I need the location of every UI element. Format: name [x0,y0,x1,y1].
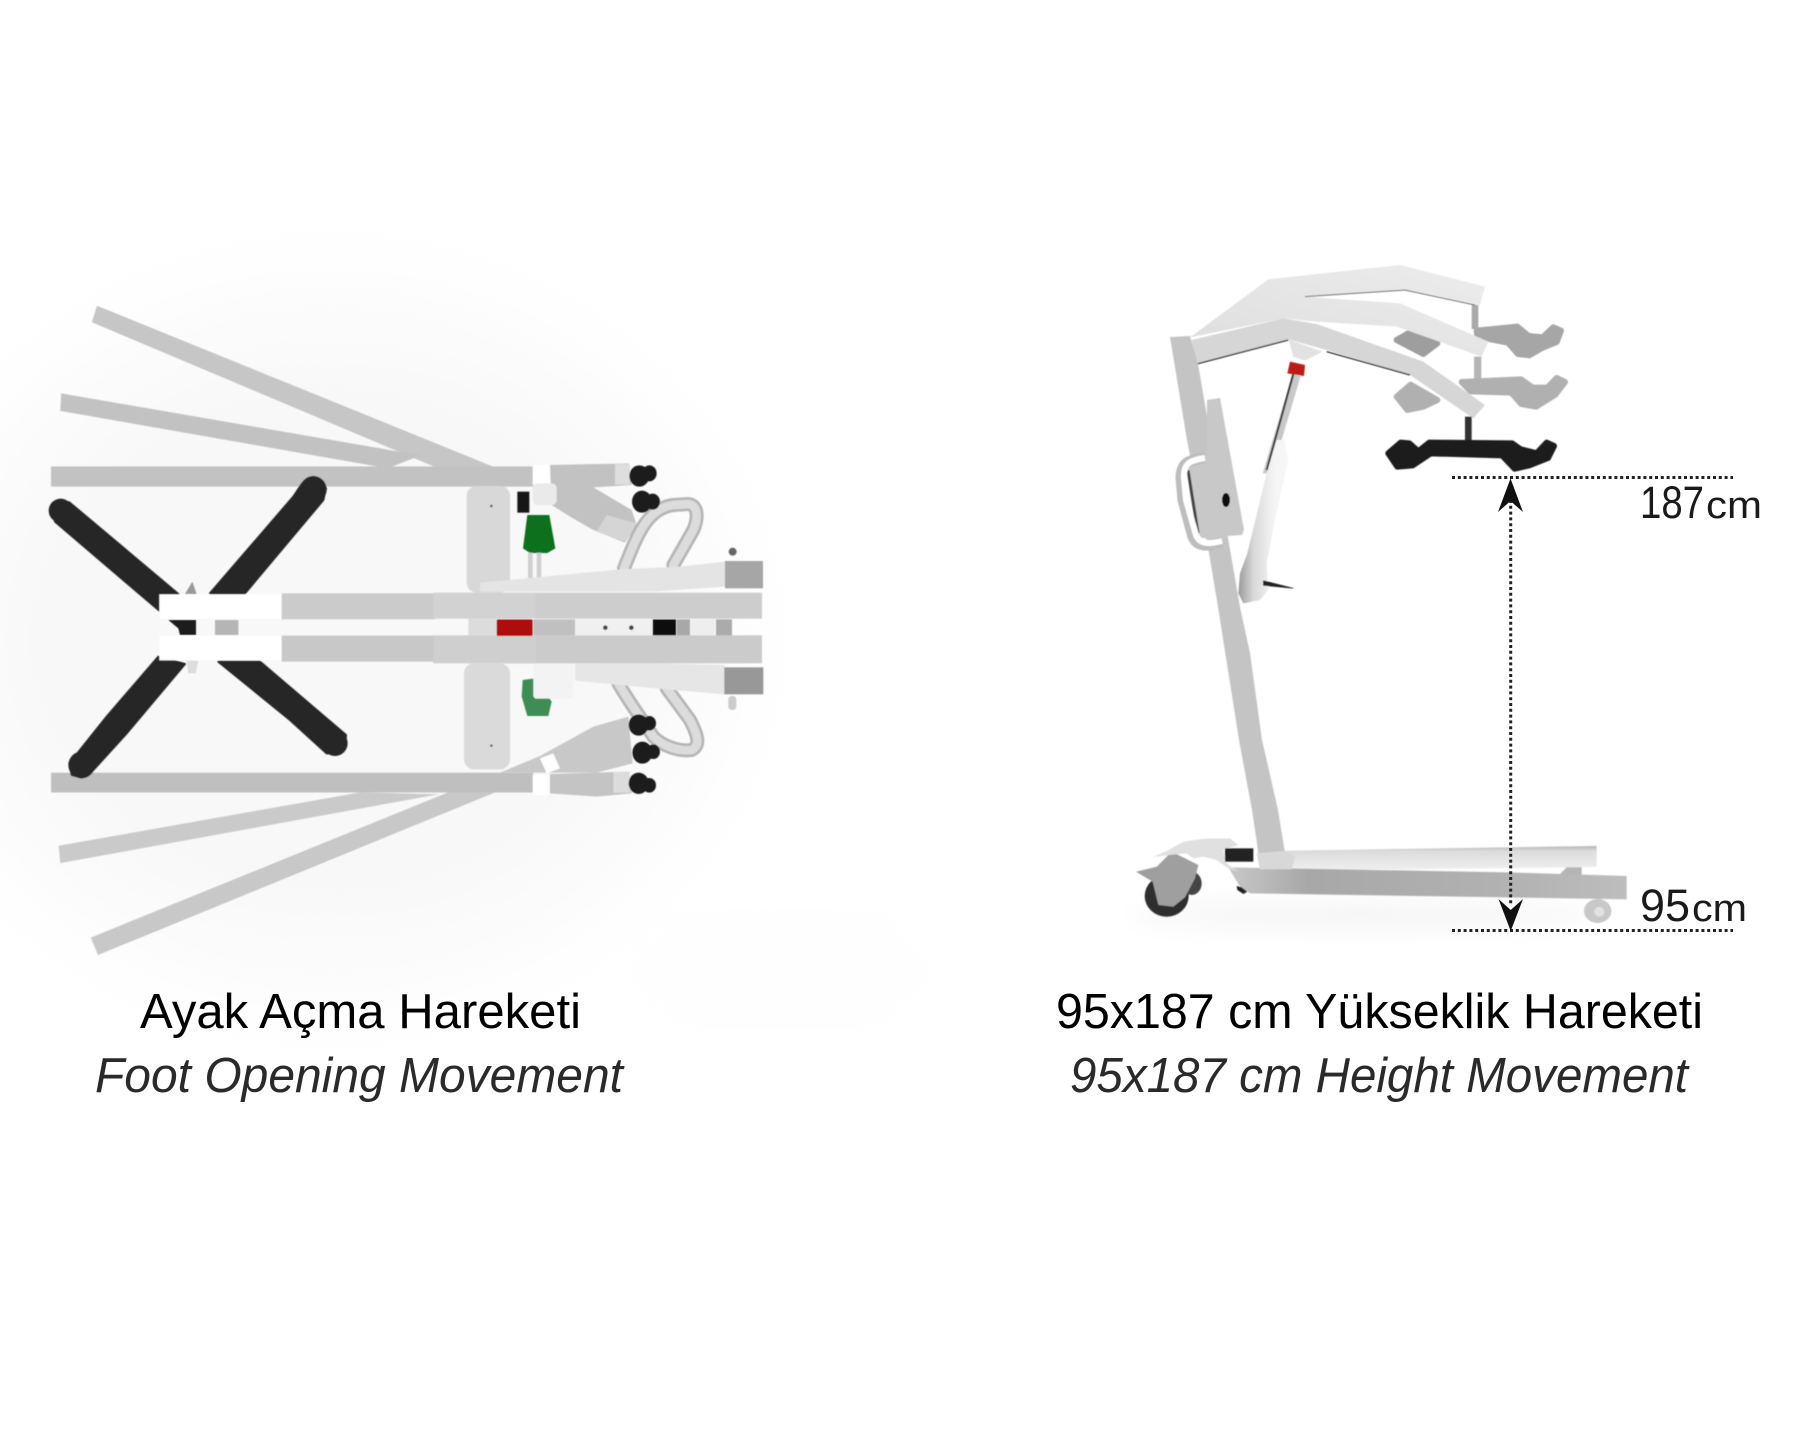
label: 95cm [1640,880,1747,931]
lower plate [477,663,725,694]
label: 187cm: 187 [1640,477,1704,528]
upper arm positions [1190,265,1488,357]
actuator body [1238,440,1293,603]
label: 187cm: cm [1706,485,1762,527]
caption: foot opening (English): Foot Opening Movement [95,1049,625,1103]
side panels [467,486,510,593]
caption: height (Turkish): 95x187 cm Yükseklik Hareketi [1056,985,1703,1039]
lower bracket [500,717,633,773]
black hanger [1465,417,1472,443]
dimension lines [1452,478,1733,930]
base legs in open and closed positions [51,306,533,955]
central beam right part [433,593,537,619]
push handle top [624,504,697,568]
hangers and arms [1190,265,1565,473]
top bracket [550,463,637,543]
actuator rod [1263,374,1301,473]
right caster [1584,899,1611,923]
mast assembly, handles and controls [433,463,763,797]
caption: foot opening (Turkish): Ayak Açma Hareketi [140,985,581,1039]
lower arm [1192,318,1485,418]
arrow: up to 187 cm [1498,478,1523,512]
knobs lower [629,714,660,794]
diagram: foot opening movement (top view) [49,306,763,955]
mast [1170,336,1293,868]
label: 95cm: 95 [1640,880,1690,931]
control plate and push handle [1181,398,1244,545]
caption: height (English): 95x187 cm Height Movement [1070,1049,1690,1103]
black support pads [49,476,348,778]
lower handle [618,683,697,750]
label: 187cm [1640,477,1762,528]
mast foot [1257,851,1295,869]
arrow: down to 95 cm [1498,899,1523,931]
upper plate [480,562,725,592]
left caster [1182,872,1202,895]
diagram: height movement (side view) [1136,265,1627,923]
shadow hanger positions [1397,327,1565,410]
base and casters [1136,838,1627,923]
label: 95cm: cm [1692,888,1747,930]
knobs top [629,465,660,513]
pivot [1288,339,1323,361]
green pedal lower [522,678,552,716]
central beam left portion [159,582,435,673]
green pump pedal [523,515,555,553]
